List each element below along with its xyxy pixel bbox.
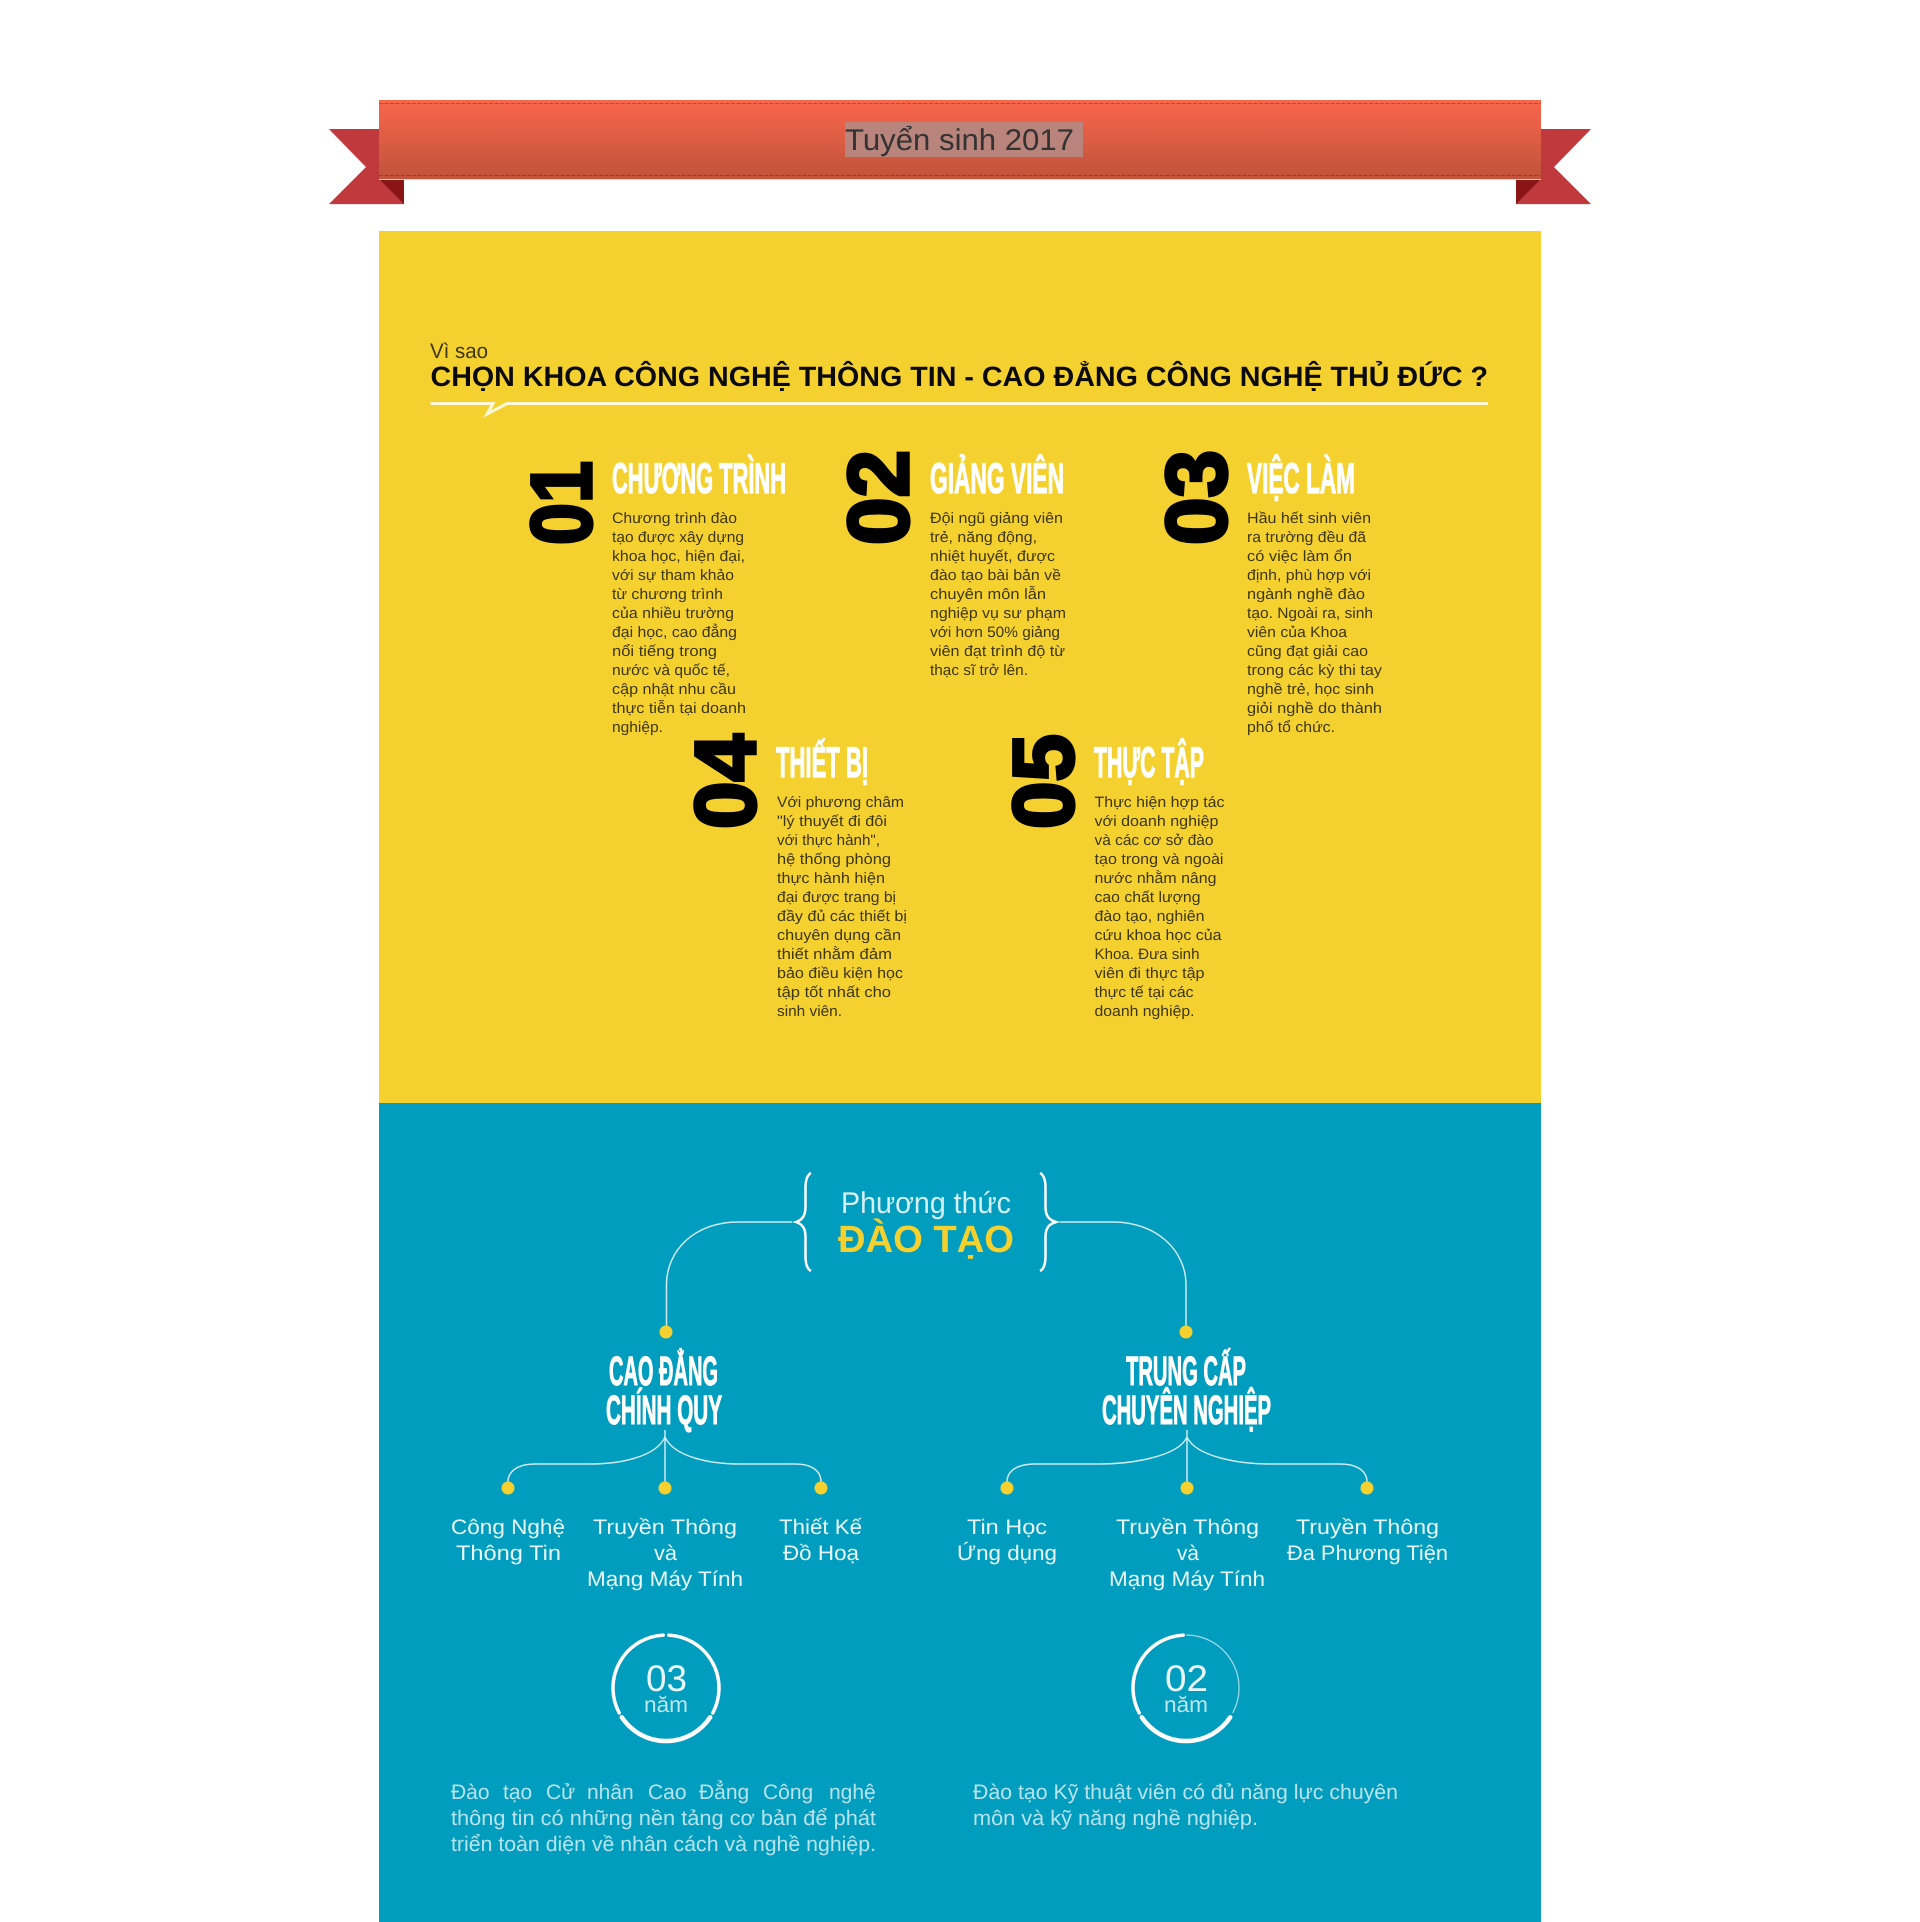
item 05: với doanh nghiệp — [1094, 813, 1218, 830]
label: thiet ke do hoa: Đồ Hoạ — [783, 1542, 859, 1565]
description: cao dang: Đẳng — [699, 1780, 749, 1804]
item 04: chuyên dụng cần — [777, 927, 901, 944]
title: trung cap — [1102, 1348, 1271, 1433]
duration ring: 02 years — [1133, 1635, 1239, 1741]
label: truyen thong da phuong tien: Truyền Thông — [1296, 1516, 1439, 1539]
label: cong nghe thong tin: Công Nghệ — [451, 1516, 565, 1539]
description: cao dang: tạo — [503, 1781, 532, 1804]
tree: trung cap — [1000, 1430, 1374, 1494]
label: truyen thong da phuong tien — [1287, 1516, 1448, 1565]
label: tin hoc ung dung: Tin Học — [967, 1516, 1047, 1539]
item 02: đào tạo bài bản về — [930, 567, 1061, 584]
item 03: VIỆC LÀM — [1247, 454, 1355, 503]
item 05: doanh nghiệp. — [1094, 1003, 1194, 1020]
label: tin hoc ung dung — [957, 1516, 1057, 1565]
ribbon banner — [329, 100, 1591, 205]
item 05: và các cơ sở đào — [1094, 832, 1214, 849]
item 05: Khoa. Đưa sinh — [1094, 946, 1200, 963]
description: cao dang: Cử — [546, 1781, 575, 1804]
label: truyen thong va mang may tinh: và — [1177, 1542, 1199, 1565]
item 04: Với phương châm — [777, 794, 904, 811]
connector: left branch — [660, 1222, 792, 1338]
connector: right branch — [1060, 1222, 1192, 1338]
label: thiet ke do hoa: Thiết Kế — [779, 1516, 862, 1539]
item 01: khoa học, hiện đại, — [612, 548, 745, 565]
item 01: đại học, cao đẳng — [612, 623, 737, 641]
label: truyen thong va mang may tinh — [1109, 1516, 1265, 1591]
label: truyen thong va mang may tinh: và — [654, 1542, 677, 1565]
description: cao dang — [451, 1780, 876, 1856]
item 05 — [996, 734, 1225, 1020]
item 04: THIẾT BỊ — [776, 738, 868, 787]
description: trung cap: Đào tạo Kỹ thuật viên có đủ năng lực chuyên — [973, 1781, 1398, 1804]
item 03 — [1149, 450, 1383, 736]
banner band — [379, 100, 1541, 180]
item 03: giỏi nghề do thành — [1247, 700, 1382, 717]
heading: training methods with braces — [796, 1173, 1056, 1271]
description: cao dang: Cao — [648, 1781, 687, 1804]
item 03: viên của Khoa — [1247, 624, 1348, 641]
item 04: đầy đủ các thiết bị — [777, 908, 907, 925]
item 04: hệ thống phòng — [777, 851, 891, 868]
item 04: tập tốt nhất cho — [777, 984, 891, 1001]
panel: training methods (blue) — [379, 1103, 1541, 1922]
label: thiet ke do hoa — [779, 1516, 862, 1565]
description: trung cap — [973, 1781, 1398, 1830]
item 01: thực tiễn tại doanh — [612, 700, 746, 717]
item 01: nghiệp. — [612, 719, 663, 736]
banner title with highlight: Tuyển sinh 2017 — [845, 124, 1074, 157]
item 03: cũng đạt giải cao — [1247, 643, 1368, 660]
item 02: Đội ngũ giảng viên — [930, 510, 1063, 527]
item 01: nước và quốc tế, — [612, 662, 730, 679]
item 04: thiết nhằm đảm — [777, 945, 892, 963]
description: cao dang: Đào — [451, 1781, 490, 1804]
item 04: với thực hành", — [777, 832, 880, 849]
item 05: Thực hiện hợp tác — [1094, 794, 1225, 811]
duration ring: 02 years: năm — [1164, 1692, 1208, 1717]
item 01: Chương trình đào — [612, 510, 737, 527]
duration ring: 03 years: 03 — [646, 1658, 687, 1699]
description: cao dang: nghệ — [829, 1781, 876, 1804]
description: cao dang: nhân — [587, 1781, 634, 1804]
item 03: trong các kỳ thi tay — [1247, 662, 1383, 679]
item 01: nổi tiếng trong — [612, 643, 717, 660]
item 05: thực tế tại các — [1094, 984, 1194, 1001]
item 03: phố tổ chức. — [1247, 719, 1335, 736]
item 01: cập nhật nhu cầu — [612, 681, 736, 698]
panel: why choose (yellow) — [379, 231, 1541, 1103]
item 01: CHƯƠNG TRÌNH — [612, 454, 786, 503]
item 02 — [831, 450, 1066, 679]
tree: cao dang — [502, 1430, 828, 1494]
label: cong nghe thong tin: Thông Tin — [456, 1542, 561, 1565]
item 05: cao chất lượng — [1094, 889, 1200, 906]
item 05: cứu khoa học của — [1094, 927, 1222, 944]
item 04: "lý thuyết đi đôi — [777, 813, 887, 830]
item 05: đào tạo, nghiên — [1094, 908, 1204, 925]
title: cao dang — [606, 1348, 722, 1433]
item 03: Hầu hết sinh viên — [1247, 510, 1371, 527]
item 03: ra trường đều đã — [1247, 529, 1367, 546]
item 02: GIẢNG VIÊN — [930, 454, 1064, 503]
item 01: từ chương trình — [612, 586, 723, 603]
item 03: tạo. Ngoài ra, sinh — [1247, 605, 1373, 622]
item 04: đại được trang bị — [777, 889, 896, 906]
column: trung cap: CHUYÊN NGHIỆP — [1102, 1387, 1271, 1433]
label: cong nghe thong tin — [451, 1516, 565, 1565]
item 03: định, phù hợp với — [1247, 567, 1371, 584]
title: trung cap: TRUNG CẤP — [1126, 1348, 1246, 1394]
label: tin hoc ung dung: Ứng dụng — [957, 1541, 1057, 1565]
label: truyen thong va mang may tinh — [587, 1516, 743, 1591]
heading: training methods with braces: Phương thức — [841, 1187, 1011, 1220]
item 03: 03 — [1149, 450, 1245, 545]
label: truyen thong da phuong tien: Đa Phương Tiện — [1287, 1542, 1448, 1565]
label: truyen thong va mang may tinh: Mạng Máy Tính — [1109, 1568, 1265, 1591]
left ribbon tail — [329, 129, 404, 205]
item 05: 05 — [996, 734, 1092, 829]
duration ring: 02 years: 02 — [1165, 1658, 1208, 1699]
item 02: 02 — [831, 450, 927, 545]
title: cao dang: CHÍNH QUY — [606, 1387, 722, 1433]
description: trung cap: môn và kỹ năng nghề nghiệp. — [973, 1807, 1258, 1830]
label: truyen thong va mang may tinh: Mạng Máy Tính — [587, 1568, 743, 1591]
item 04: thực hành hiện — [777, 870, 885, 887]
item 05: nước nhằm nâng — [1094, 869, 1216, 887]
item 05: viên đi thực tập — [1094, 965, 1204, 982]
item 04: 04 — [678, 734, 774, 829]
item 02: chuyên môn lẫn — [930, 586, 1046, 603]
duration ring: 03 years: năm — [644, 1692, 688, 1717]
right ribbon tail — [1516, 129, 1591, 205]
heading: why choose: CHỌN KHOA CÔNG NGHỆ THÔNG TIN - CAO ĐẲNG CÔNG NGHỆ THỦ ĐỨC ? — [430, 360, 1488, 392]
item 04: bảo điều kiện học — [777, 965, 904, 982]
item 01: tạo được xây dựng — [612, 529, 744, 546]
description: cao dang: Công — [763, 1781, 813, 1804]
item 02: thạc sĩ trở lên. — [930, 662, 1028, 679]
duration ring: 03 years — [613, 1635, 719, 1741]
column: trung cap — [957, 1348, 1448, 1830]
item 03: nghề trẻ, học sinh — [1247, 681, 1374, 698]
item 02: với hơn 50% giảng — [930, 624, 1060, 641]
title: cao dang: CAO ĐẲNG — [609, 1348, 718, 1394]
column: cao dang — [451, 1348, 876, 1856]
item 04 — [678, 734, 907, 1020]
item 02: trẻ, năng động, — [930, 529, 1037, 546]
item 02: nghiệp vụ sư phạm — [930, 605, 1066, 622]
item 01 — [514, 454, 786, 736]
item 03: ngành nghề đào — [1247, 586, 1365, 603]
item 01: với sự tham khảo — [612, 567, 734, 584]
label: truyen thong va mang may tinh: Truyền Thông — [593, 1516, 737, 1539]
item 01: của nhiều trường — [612, 605, 734, 622]
description: cao dang: thông tin có những nền tảng cơ bản để phát — [451, 1807, 876, 1830]
label: truyen thong va mang may tinh: Truyền Thông — [1116, 1516, 1259, 1539]
item 01: 01 — [514, 461, 610, 545]
heading: why choose: Vì sao — [430, 340, 488, 363]
item 05: THỰC TẬP — [1094, 738, 1204, 787]
item 04: sinh viên. — [777, 1003, 842, 1020]
heading: training methods with braces: ĐÀO TẠO — [838, 1218, 1014, 1261]
item 02: nhiệt huyết, được — [930, 548, 1056, 565]
item 03: có việc làm ổn — [1247, 548, 1352, 565]
description: cao dang: triển toàn diện về nhân cách và nghề nghiệp. — [451, 1833, 876, 1856]
item 02: viên đạt trình độ từ — [930, 643, 1065, 660]
item 05: tạo trong và ngoài — [1094, 851, 1224, 868]
heading: why choose — [430, 340, 1488, 414]
